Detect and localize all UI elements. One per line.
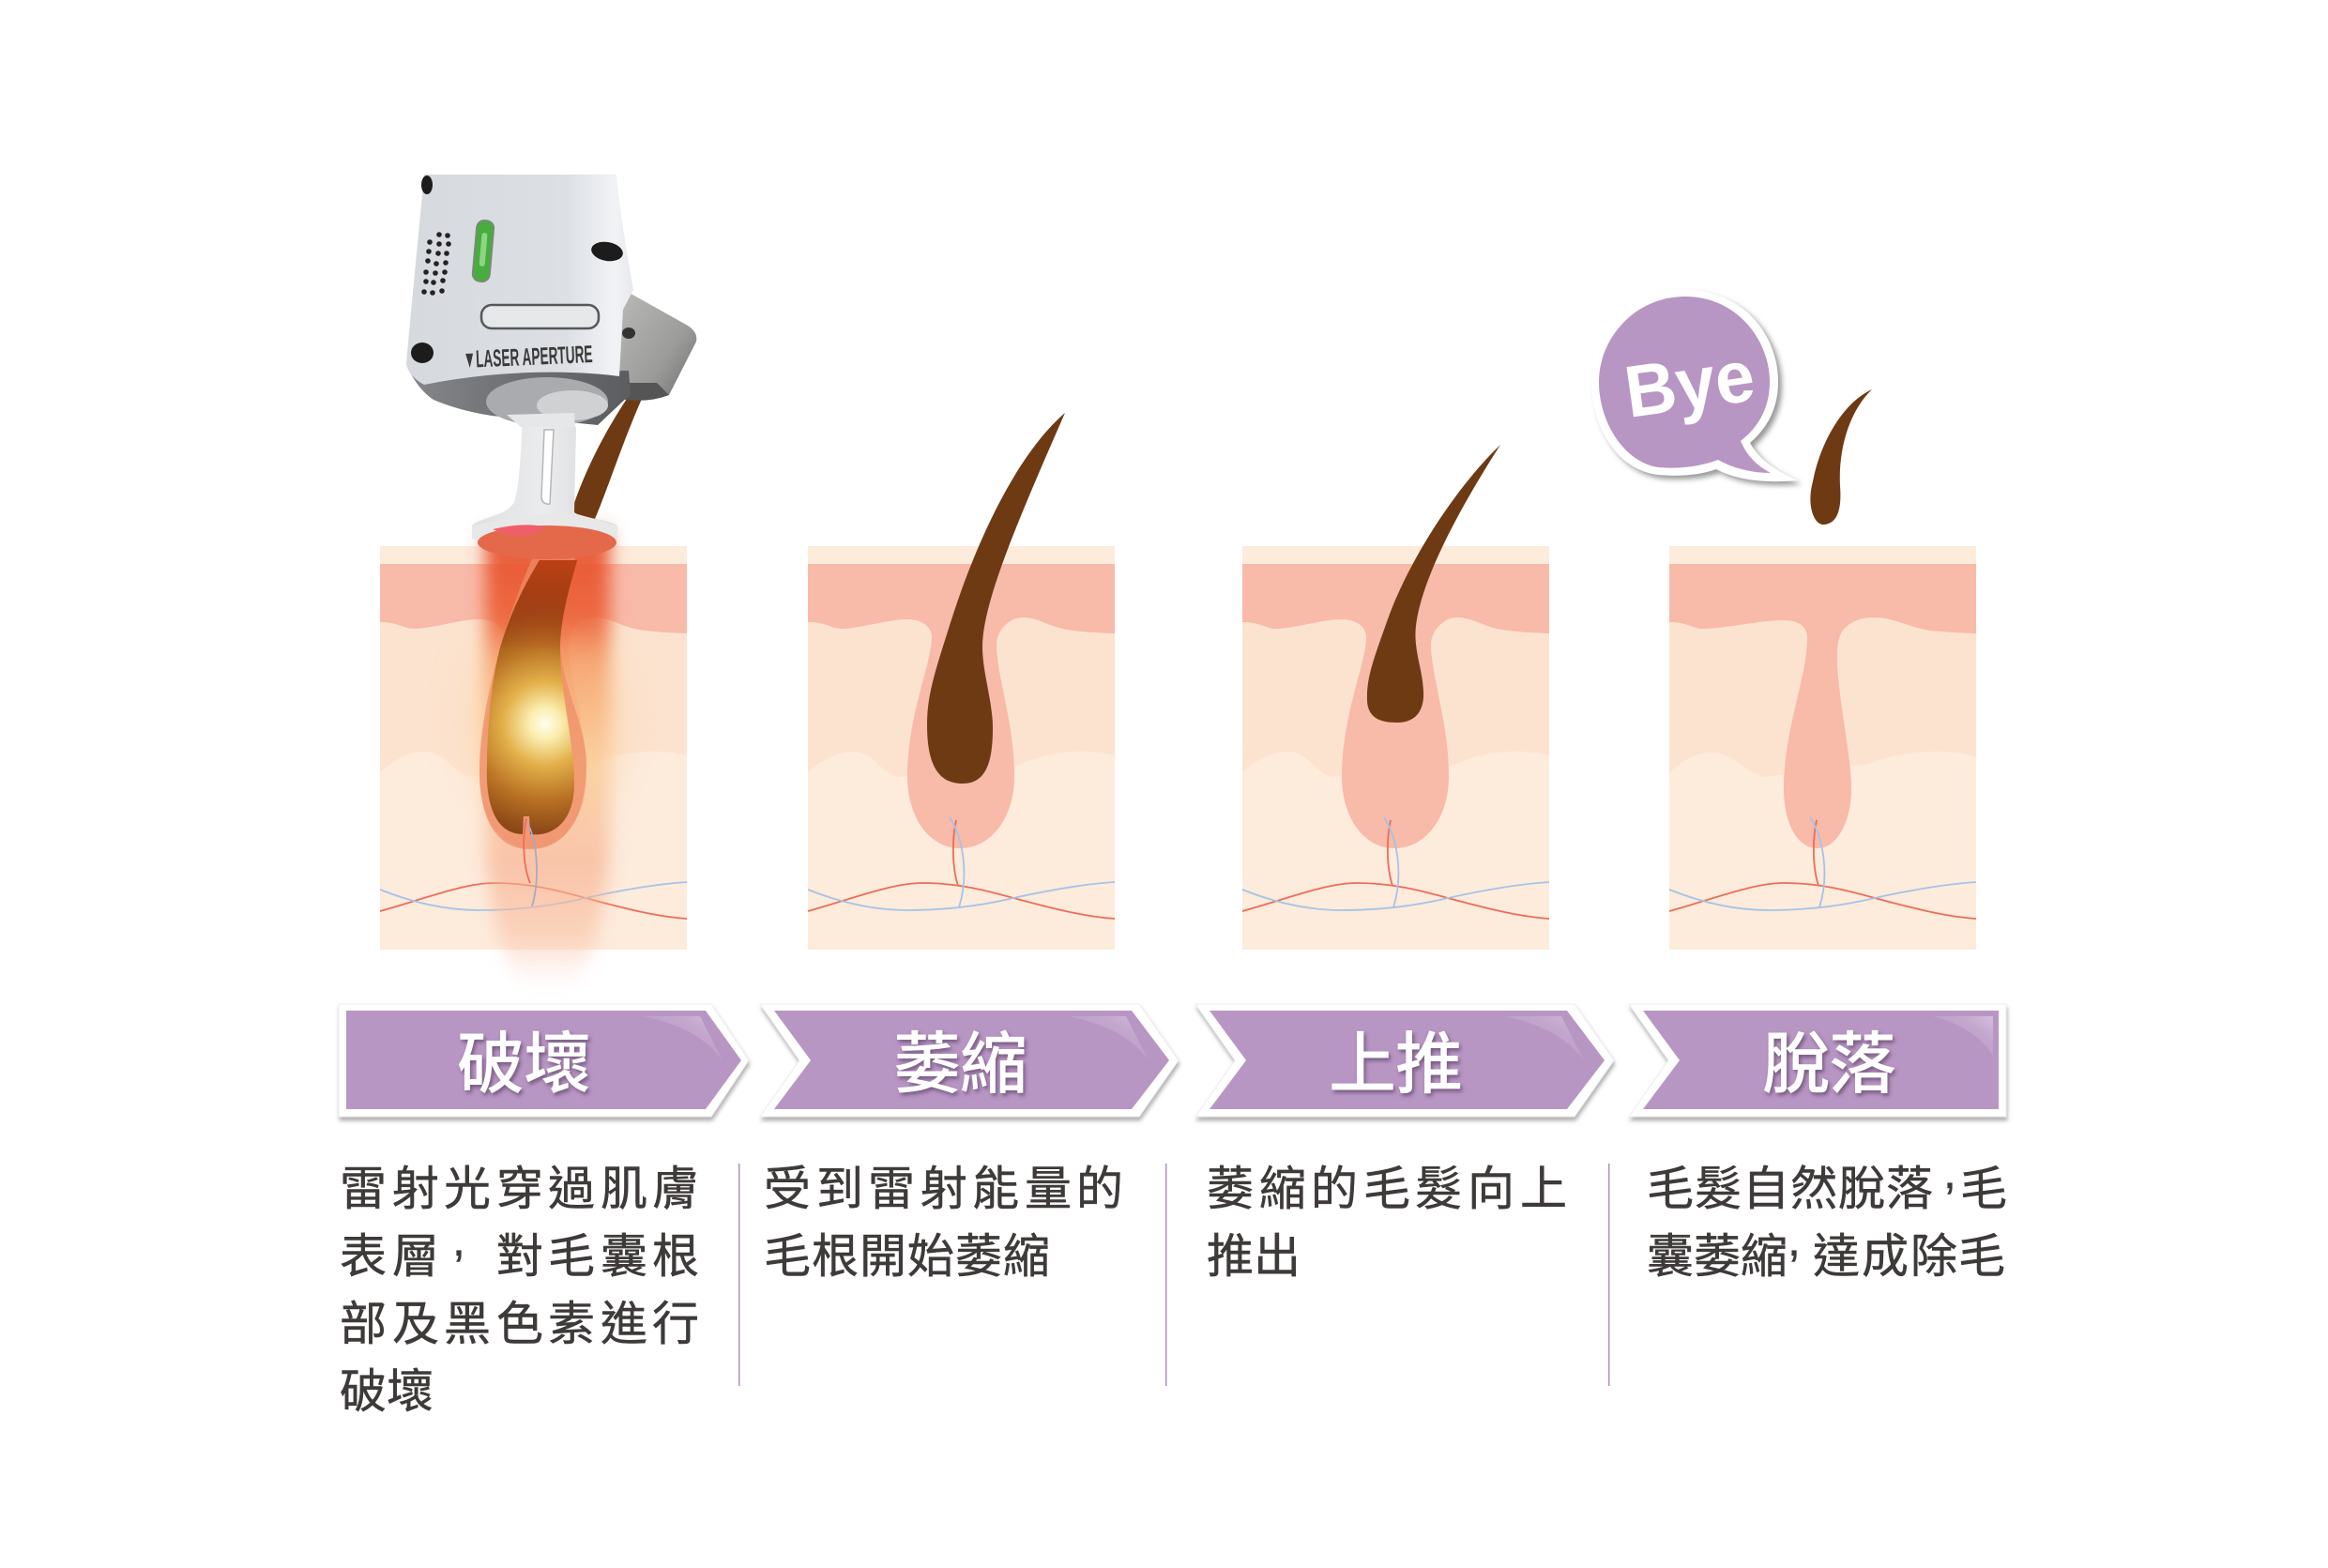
heading: 萎縮 (893, 1028, 1027, 1103)
hair (1367, 445, 1500, 723)
skin layers (808, 546, 1115, 950)
heading: 脫落 (1762, 1028, 1896, 1103)
button (481, 305, 599, 328)
collar (486, 377, 608, 426)
hair top tint (500, 560, 577, 647)
text block: step 3 description (1207, 1163, 1567, 1283)
panel: step 3 skin with hair pushed up (1242, 445, 1549, 950)
panel: step 4 skin with empty follicle (1669, 546, 1976, 950)
follicle heated (479, 549, 586, 849)
text block: step 2 description: 受到雷射能量的 (764, 1163, 1123, 1215)
blood vessels (1242, 817, 1549, 919)
text block: step 1 description: 表層,對毛囊根 (340, 1213, 699, 1283)
hair shaft above skin, behind device (571, 399, 642, 519)
falling hair (1810, 389, 1872, 525)
stem slot (541, 430, 554, 504)
device label: ▼LASER APERTURE (463, 340, 593, 373)
heated hair root (487, 560, 577, 834)
laser glow column (485, 530, 610, 991)
text block: step 2 description: 毛根開始萎縮 (764, 1230, 1050, 1283)
text block: step 4 description: 囊萎縮,達成除毛 (1647, 1213, 2005, 1283)
underside (406, 364, 631, 425)
panel: step 2 skin with shrinking root (808, 413, 1115, 950)
lens disc (472, 513, 617, 559)
soft heat halo (471, 624, 621, 821)
laser handpiece device (406, 175, 696, 559)
text block: step 4 description (1647, 1146, 2007, 1283)
icon: green LED (472, 220, 495, 282)
text block: step 1 description (340, 1163, 699, 1418)
wing underside (619, 383, 669, 401)
text block: step 4 description: 毛髮自然脫落,毛 (1647, 1146, 2007, 1215)
text block: step 3 description: 萎縮的毛髮向上 (1207, 1163, 1567, 1215)
step arrow: 脫落 (1629, 1004, 2006, 1117)
skin layers (1669, 546, 1976, 950)
Bye label: Bye (1620, 333, 1759, 434)
blood vessels (808, 817, 1115, 919)
heading: 上推 (1329, 1028, 1463, 1103)
body shell (406, 175, 633, 385)
blood vessels (1669, 817, 1976, 919)
icon: mounting holes (411, 175, 624, 363)
panel: step 1 skin cross-section with laser (380, 399, 687, 991)
text block: step 1 description: 部及黑色素進行 (340, 1298, 699, 1350)
icon: speaker dots (421, 232, 451, 296)
hair (927, 413, 1065, 784)
text block: step 2 description (764, 1163, 1123, 1283)
step arrow: 上推 (1195, 1004, 1614, 1117)
papilla vessels (524, 818, 537, 906)
wing accessory (619, 291, 696, 399)
text block: step 3 description: 推出 (1207, 1230, 1301, 1283)
heading: 破壞 (457, 1028, 591, 1103)
stem (472, 405, 617, 548)
text block: step 1 description: 破壞 (340, 1365, 434, 1418)
skin layers (380, 546, 687, 950)
skin layers (1242, 546, 1549, 950)
step arrow: 萎縮 (760, 1004, 1179, 1117)
wing screw (622, 327, 635, 339)
step arrow: 破壞 (339, 1004, 749, 1117)
speech bubble: Bye (1591, 290, 1798, 481)
text block: step 1 description: 雷射光穿過肌膚 (340, 1163, 699, 1215)
blood vessels (380, 882, 687, 919)
